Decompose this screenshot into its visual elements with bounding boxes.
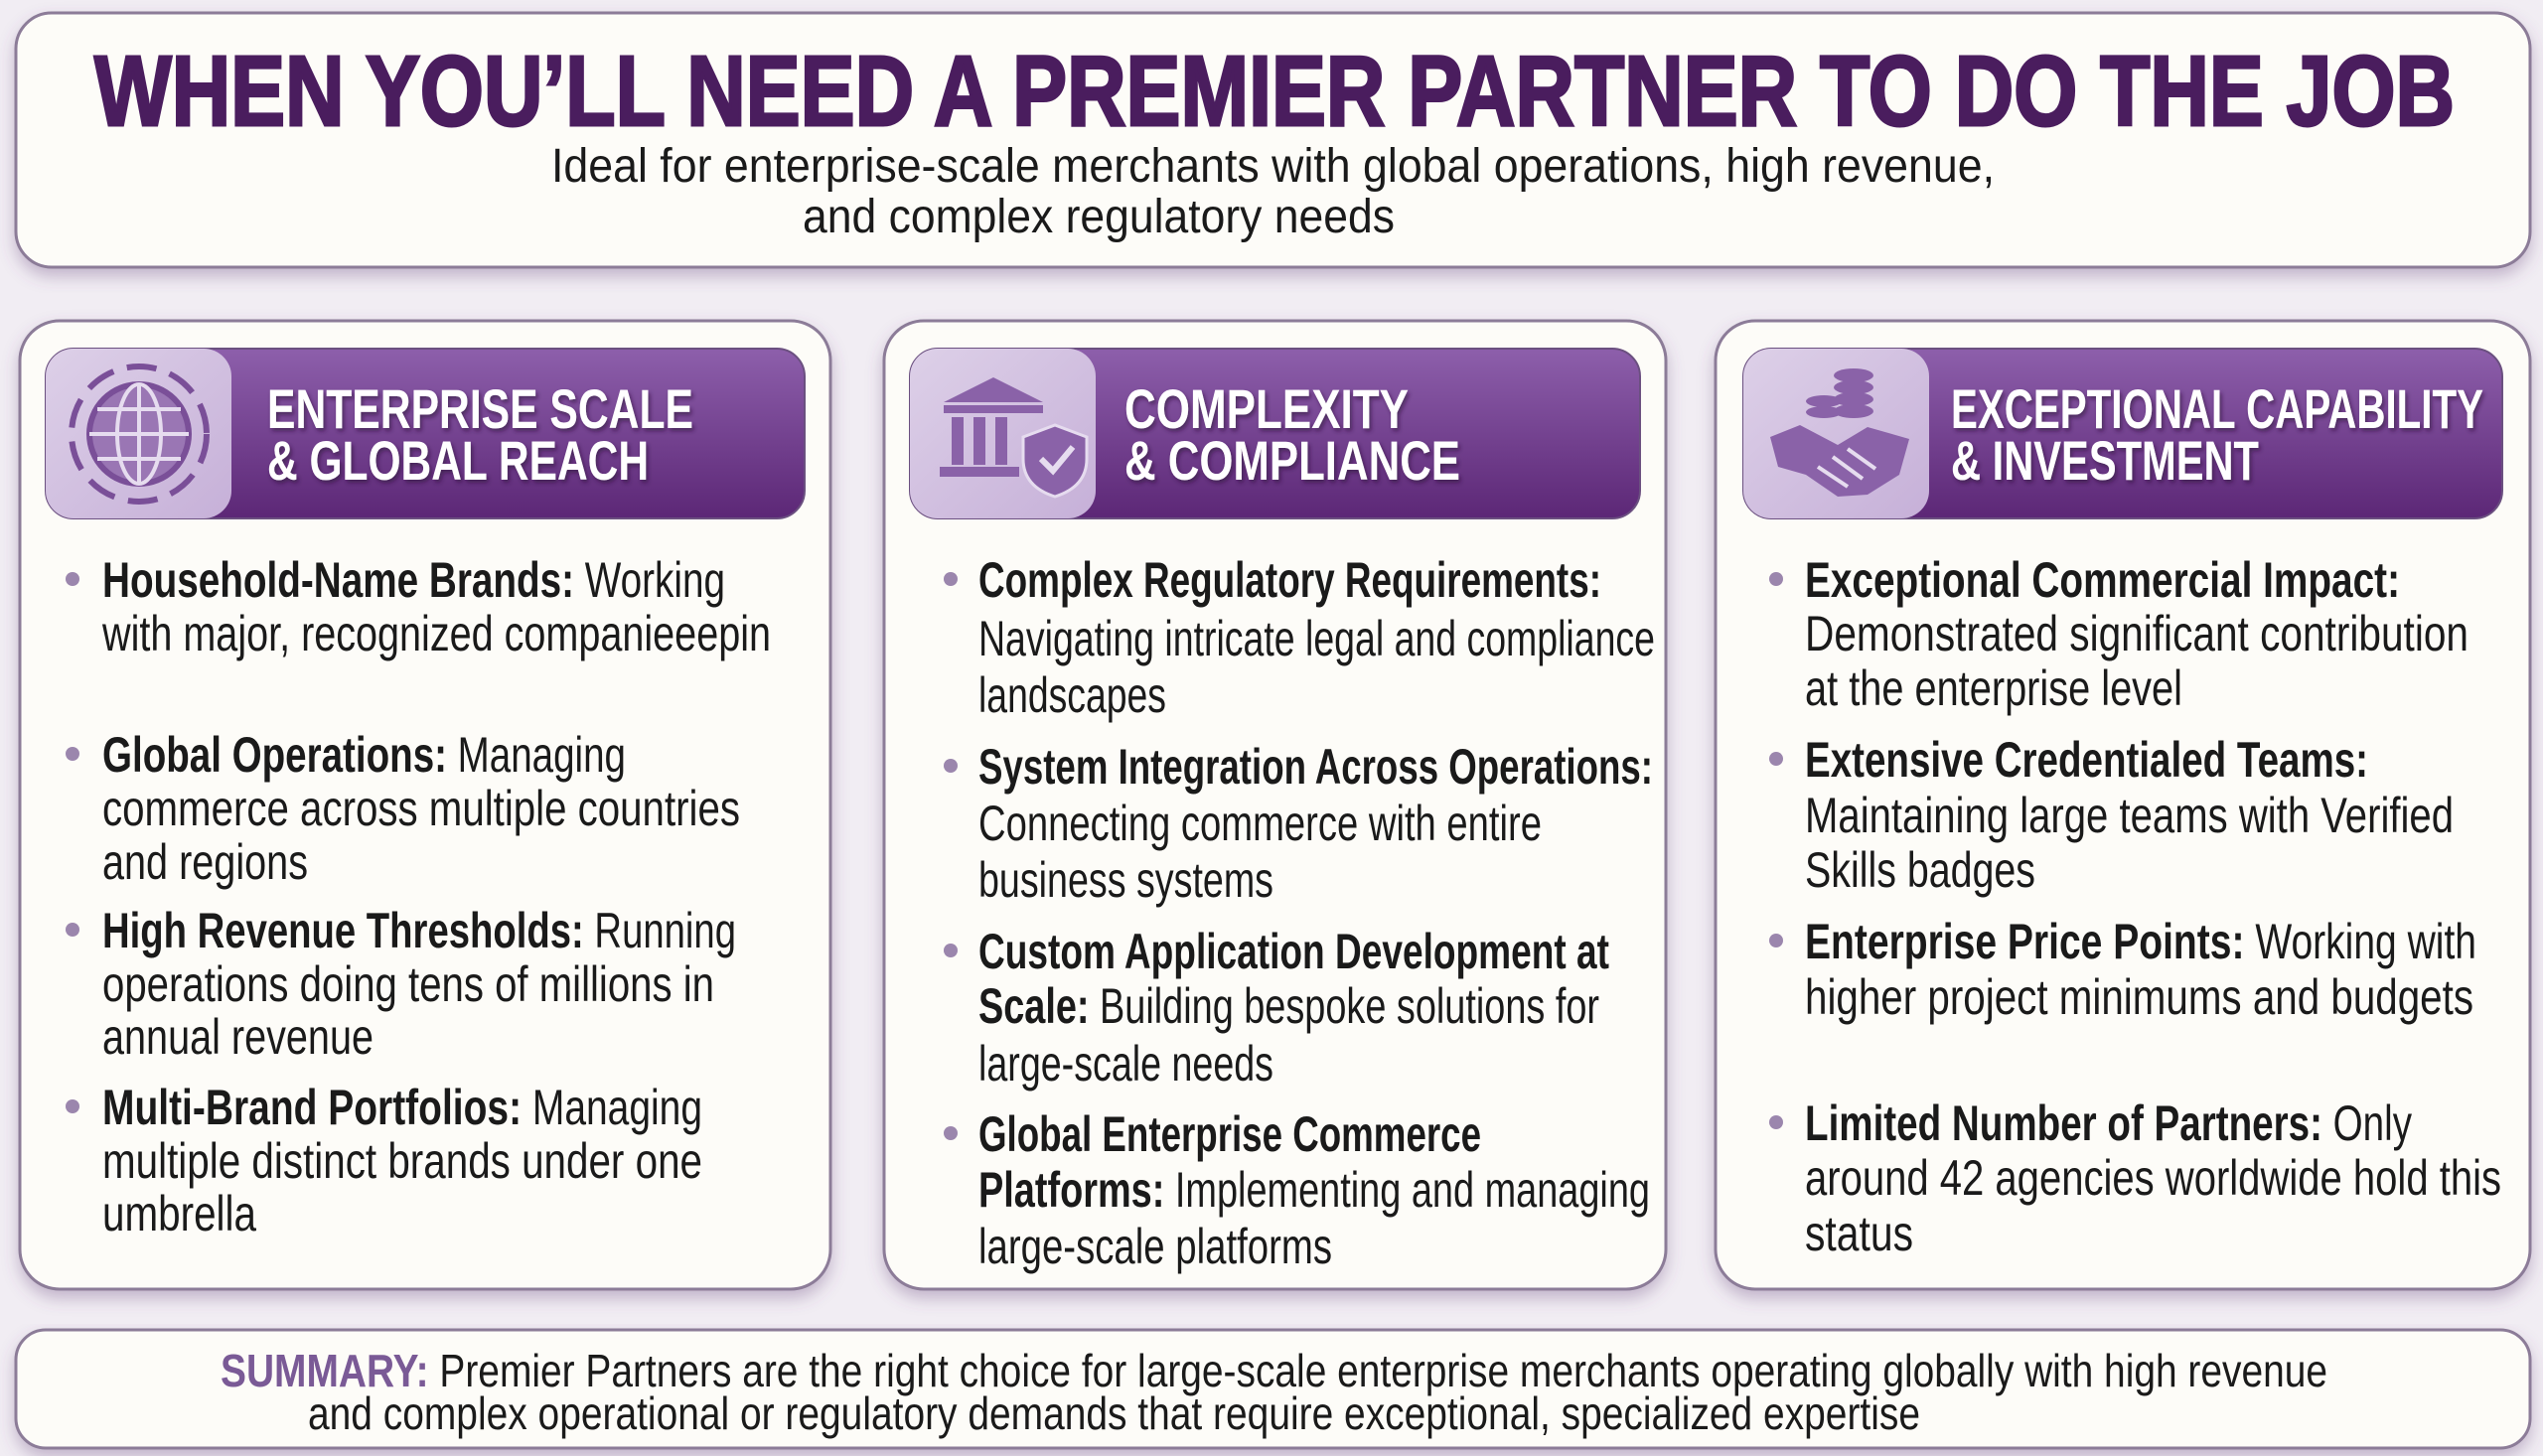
bullets: Global Operations: Managing (102, 727, 626, 783)
bullets: System Integration Across Operations: (978, 739, 1653, 795)
bullets: Enterprise Price Points: Working with (1805, 914, 2476, 969)
bullets: Connecting commerce with entire (978, 796, 1542, 851)
icon: bank with shield (940, 377, 1087, 497)
bullets: Scale: Building bespoke solutions for (978, 978, 1599, 1034)
bullets: annual revenue (102, 1009, 374, 1065)
bullets (1769, 552, 2501, 1261)
bullets: business systems (978, 852, 1273, 908)
header text: ENTERPRISE SCALE (267, 377, 693, 440)
header text: & GLOBAL REACH (267, 429, 649, 492)
icon: globe (72, 366, 207, 502)
header bar (910, 349, 1640, 518)
header text: & INVESTMENT (1951, 429, 2259, 492)
summary box: and complex operational or regulatory demands that require exceptional, specialized expertise (308, 1387, 1920, 1439)
bullets (944, 552, 1655, 1274)
bullets: large-scale platforms (978, 1219, 1332, 1274)
header text: COMPLEXITY (1124, 377, 1409, 440)
header bar (1743, 349, 2502, 518)
bullets: landscapes (978, 667, 1166, 723)
bullets: multiple distinct brands under one (102, 1133, 702, 1189)
header bar (46, 349, 805, 518)
subtitle: and complex regulatory needs (803, 191, 1395, 243)
subtitle: Ideal for enterprise-scale merchants with global operations, high revenue, (551, 140, 1995, 193)
bullets: Household-Name Brands: Working (102, 552, 725, 608)
bullets: Global Enterprise Commerce (978, 1106, 1481, 1162)
bullets: High Revenue Thresholds: Running (102, 903, 736, 958)
panel: enterprise scale (20, 321, 830, 1289)
header text: & COMPLIANCE (1124, 429, 1460, 492)
title box (16, 13, 2530, 267)
subtitle (551, 140, 1995, 243)
bullets: Multi-Brand Portfolios: Managing (102, 1080, 702, 1135)
bullets (66, 552, 771, 1241)
header text (1951, 377, 2483, 492)
header text (267, 377, 693, 492)
panel: capability (1716, 321, 2530, 1289)
bullets: Custom Application Development at (978, 924, 1609, 979)
bullets: and regions (102, 834, 308, 890)
bullets: at the enterprise level (1805, 660, 2182, 716)
bullets: status (1805, 1206, 1913, 1261)
header text (1124, 377, 1460, 492)
bullets: with major, recognized companieeepin (101, 606, 771, 661)
summary box (16, 1330, 2530, 1448)
bullets: Platforms: Implementing and managing (978, 1162, 1650, 1218)
panel: complexity (884, 321, 1666, 1289)
bullets: operations doing tens of millions in (102, 956, 714, 1012)
icon: handshake and coins (1770, 368, 1909, 497)
bullets: Limited Number of Partners: Only (1805, 1095, 2412, 1151)
bullets: Complex Regulatory Requirements: (978, 552, 1601, 608)
bullets: umbrella (102, 1186, 256, 1241)
bullets: Extensive Credentialed Teams: (1805, 732, 2368, 788)
bullets: commerce across multiple countries (102, 781, 740, 836)
bullets: Navigating intricate legal and compliance (978, 611, 1655, 666)
bullets: large-scale needs (978, 1036, 1273, 1092)
bullets: Skills badges (1805, 842, 2035, 898)
